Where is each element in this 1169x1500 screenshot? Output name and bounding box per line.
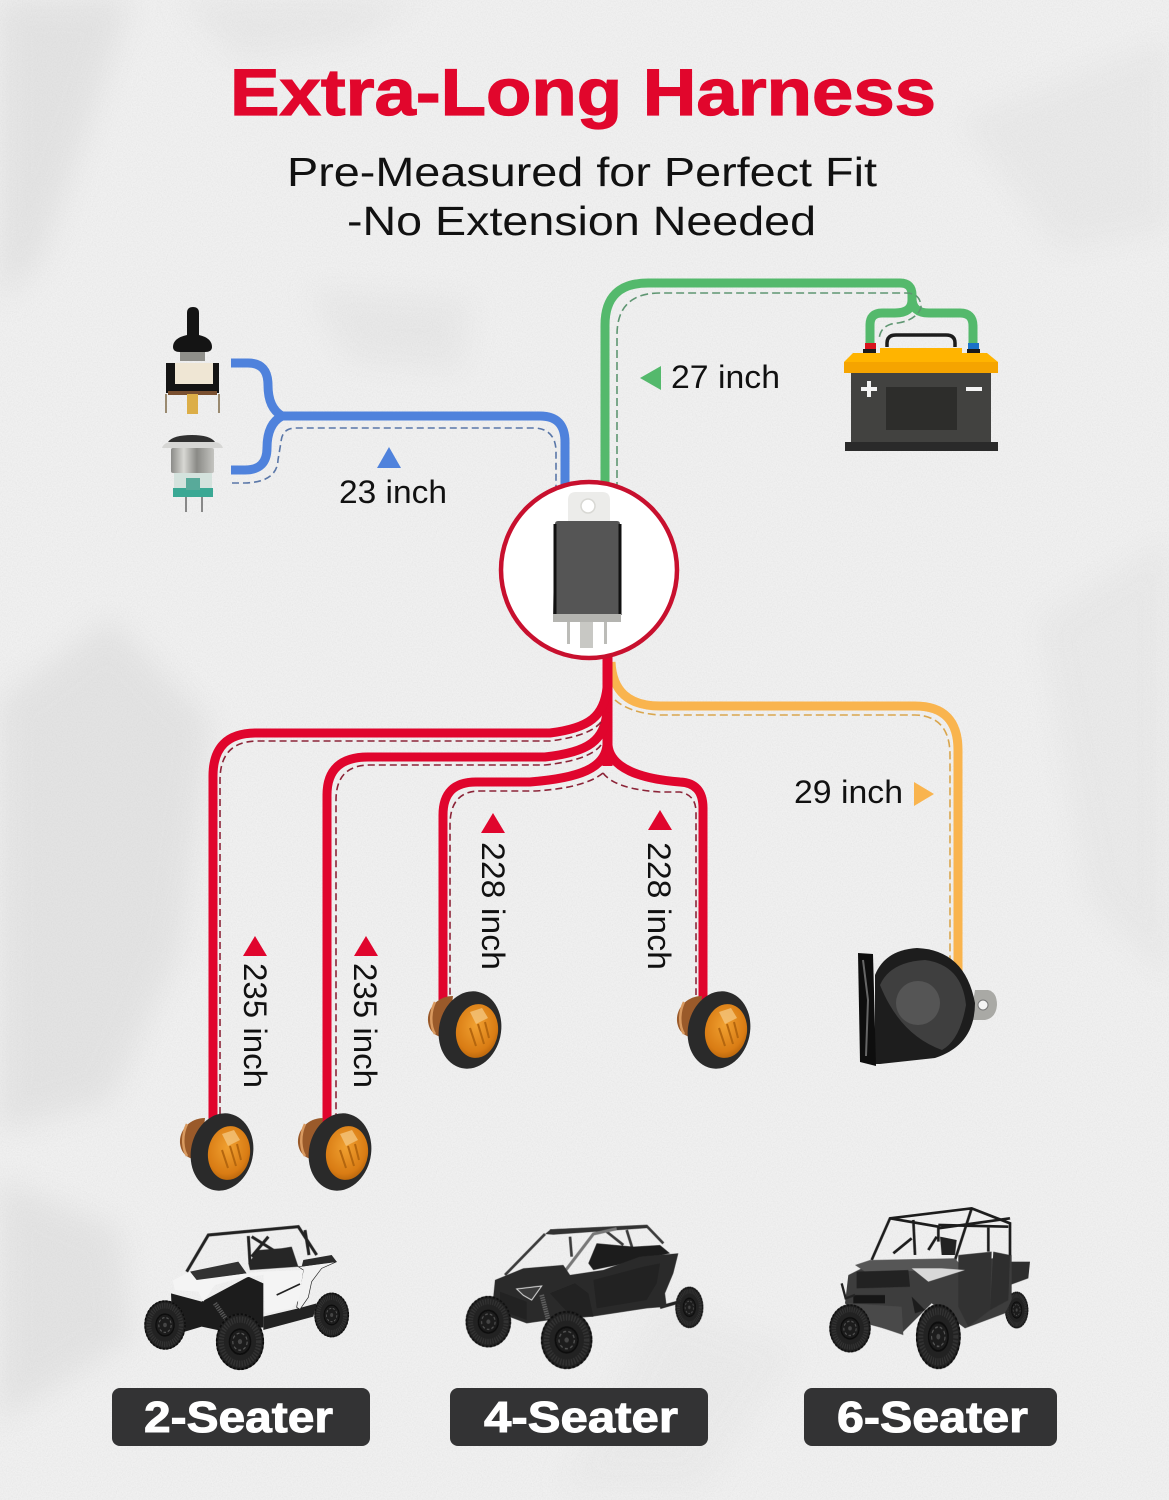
icon: battery [844,335,998,451]
vehicle: 6-seater UTV [829,1208,1030,1369]
subtitle: Pre-Measured for Perfect Fit [287,149,878,195]
wire: green battery harness [605,283,973,490]
label: 6-Seater: 6-Seater [837,1393,1028,1442]
subtitle: -No Extension Needed [347,198,816,244]
arrow and label: 228 inch left: 228 inch [475,842,511,970]
wire: blue switch harness [231,363,565,495]
arrow and label: 235 inch right: 235 inch [347,963,383,1088]
title: Extra-Long Harness [230,55,936,129]
label: 6-Seater [804,1388,1057,1446]
arrow and label: 27 inch: 27 inch [671,359,780,395]
wire: red light harness [213,655,703,1122]
arrow and label: 29 inch: 29 inch [794,774,903,810]
label: 4-Seater [450,1388,708,1446]
light 2 [298,1107,378,1197]
light 1 [180,1107,260,1197]
arrow and label: 235 inch left: 235 inch [237,963,273,1088]
light 3 [428,985,508,1075]
icon: push button switch [162,435,223,512]
vehicle: 2-seater UTV [144,1227,349,1370]
label: 2-Seater [112,1388,370,1446]
arrow and label: 23 inch [339,447,447,510]
icon: toggle switch [165,307,220,414]
relay in red circle [501,482,677,658]
label: 4-Seater: 4-Seater [484,1393,678,1442]
subtitle [287,149,878,244]
icon: horn [858,948,997,1066]
arrow and label: 228 inch right: 228 inch [641,842,677,970]
vehicle: 4-seater UTV [466,1225,703,1369]
arrow and label: 23 inch: 23 inch [339,474,447,510]
wire: orange horn harness [611,662,958,975]
label: 2-Seater: 2-Seater [144,1393,333,1442]
light 4 [677,985,757,1075]
